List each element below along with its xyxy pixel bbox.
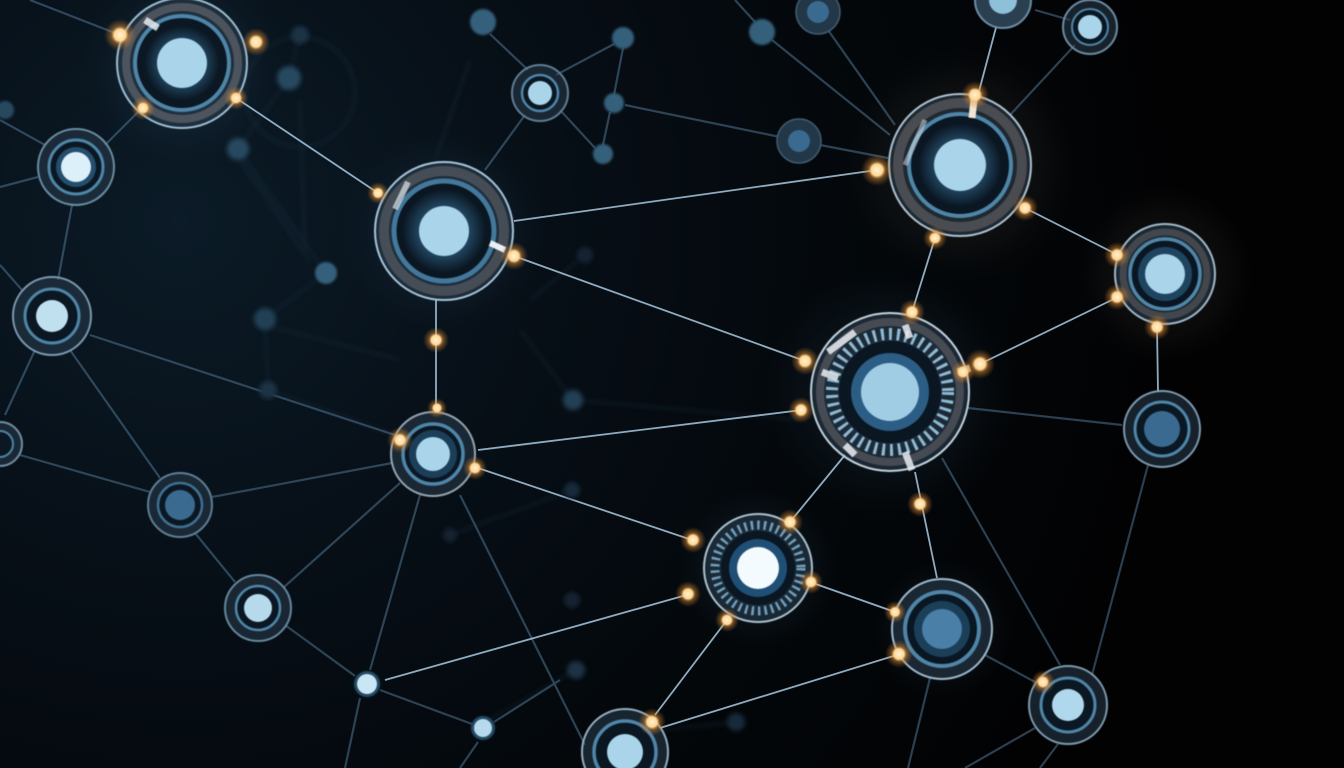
glows behind main nodes	[82, 0, 1255, 699]
primary bright links	[236, 20, 1158, 728]
node: upper mid small	[512, 65, 568, 121]
node: G bright centre	[704, 514, 812, 622]
node: lower left bright	[225, 575, 291, 641]
node: left middle	[13, 277, 91, 355]
node: F centre left	[391, 412, 475, 496]
node: left edge	[0, 422, 22, 466]
node: top left	[117, 0, 247, 128]
distant blurred nodes	[0, 9, 775, 284]
node: lower left dark	[148, 473, 212, 537]
node: C top right large	[889, 90, 1031, 236]
node: B large left centre	[375, 162, 513, 300]
faint background links	[238, 35, 800, 730]
node: D central hub with ticks	[811, 313, 970, 471]
node: J bottom right	[1029, 666, 1107, 744]
node: K bottom centre	[582, 709, 668, 768]
node: top right small nodes	[777, 0, 1117, 163]
node: H lower right	[892, 579, 992, 679]
orange glowing connectors	[104, 19, 1170, 736]
node: E right	[1115, 224, 1215, 324]
faint out-of-focus nodes	[227, 26, 745, 731]
node: I right dark	[1124, 391, 1200, 467]
node: small bright dots	[350, 667, 499, 744]
node: upper left small	[38, 129, 114, 205]
